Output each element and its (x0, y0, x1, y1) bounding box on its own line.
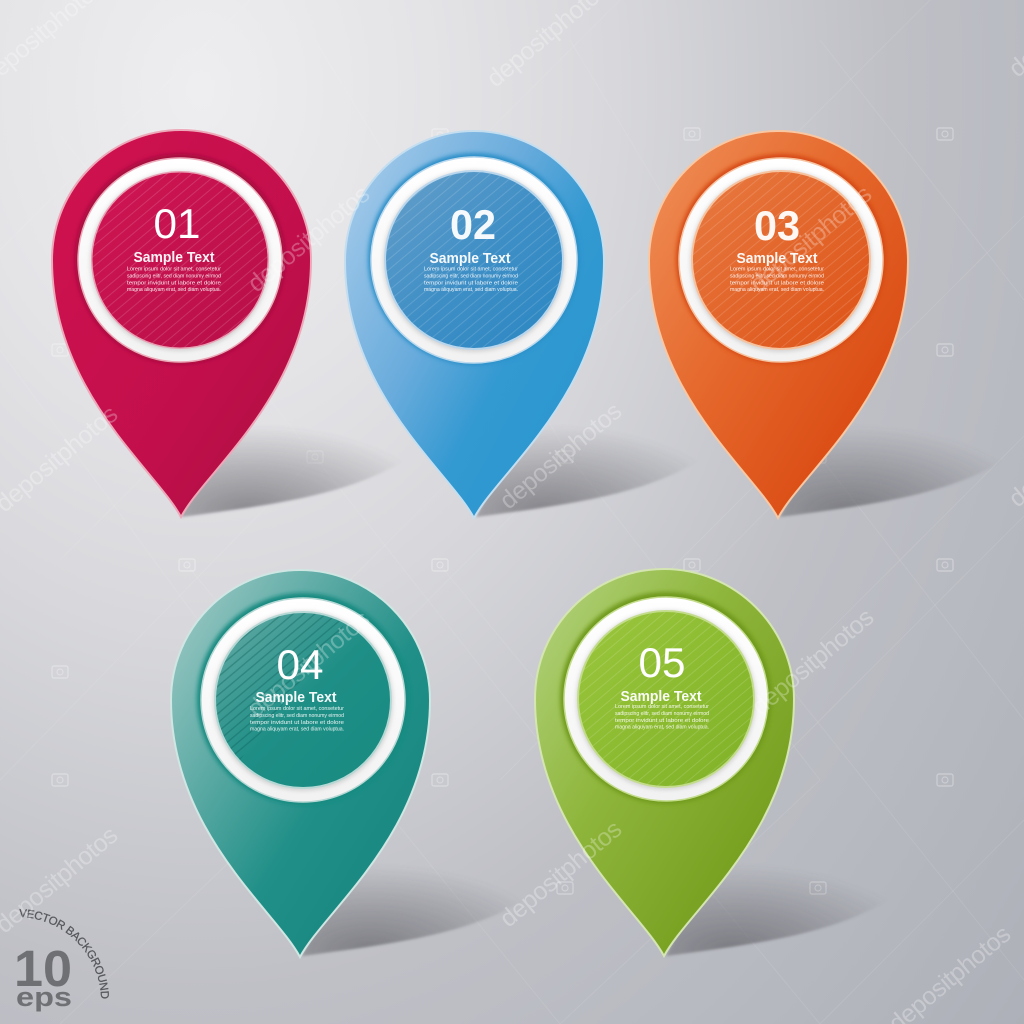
body text (615, 704, 709, 730)
curved label: VECTOR BACKGROUND (19, 908, 109, 999)
stock watermarks: depositphotos (494, 815, 627, 933)
pin 05: green (535, 569, 794, 956)
badge: vector background 10 eps (14, 908, 109, 1012)
body text (424, 266, 518, 293)
body text: sadipscing elitr, sed diam nonumy eirmod (250, 713, 344, 719)
body text: sadipscing elitr, sed diam nonumy eirmod (615, 711, 709, 717)
eps label: eps (16, 982, 72, 1012)
body text: magna aliquyam erat, sed diam voluptua. (250, 726, 344, 732)
pin 01: crimson (52, 130, 311, 517)
stock watermarks: depositphotos (494, 397, 627, 515)
heading: sample text: Sample Text (736, 251, 818, 267)
number 10: 10 (14, 940, 72, 997)
number 05: 05 (638, 639, 686, 686)
body text: tempor invidunt ut labore et dolore (615, 718, 709, 724)
pin 03: orange (649, 131, 908, 518)
body text: magna aliquyam erat, sed diam voluptua. (730, 287, 824, 293)
body text (250, 706, 344, 732)
body text: Lorem ipsum dolor sit amet, consetetur (250, 706, 344, 712)
pin 04: teal (171, 570, 430, 957)
body text: tempor invidunt ut labore et dolore (424, 280, 518, 286)
stock watermarks: depositphotos (744, 180, 877, 298)
stock watermarks: depositphotos (242, 180, 375, 298)
body text (730, 266, 824, 293)
body text: tempor invidunt ut labore et dolore (250, 720, 344, 726)
body text: tempor invidunt ut labore et dolore (127, 280, 221, 286)
body text: sadipscing elitr, sed diam nonumy eirmod (127, 274, 221, 280)
stock watermarks: depositphotos (746, 603, 879, 721)
number 04: 04 (276, 641, 324, 688)
body text: Lorem ipsum dolor sit amet, consetetur (127, 266, 221, 272)
pin shadows (181, 414, 1005, 956)
heading: sample text: Sample Text (134, 250, 215, 266)
body text: tempor invidunt ut labore et dolore (730, 280, 824, 286)
body text: Lorem ipsum dolor sit amet, consetetur (424, 266, 518, 272)
number 02: 02 (450, 201, 496, 248)
body text: Lorem ipsum dolor sit amet, consetetur (615, 704, 709, 710)
heading: sample text: Sample Text (620, 689, 702, 705)
body text: magna aliquyam erat, sed diam voluptua. (127, 287, 221, 293)
body text: magna aliquyam erat, sed diam voluptua. (615, 724, 709, 730)
body text: sadipscing elitr, sed diam nonumy eirmod (730, 274, 824, 280)
heading: sample text: Sample Text (430, 251, 511, 267)
stock watermarks: depositphotos (242, 605, 375, 723)
number 01: 01 (154, 200, 200, 247)
pin 02: blue (345, 131, 604, 518)
body text: magna aliquyam erat, sed diam voluptua. (424, 287, 518, 293)
number 03: 03 (754, 202, 800, 249)
body text: Lorem ipsum dolor sit amet, consetetur (730, 266, 824, 272)
heading: sample text: Sample Text (256, 690, 337, 706)
body text (127, 266, 221, 293)
body text: sadipscing elitr, sed diam nonumy eirmod (424, 274, 518, 280)
